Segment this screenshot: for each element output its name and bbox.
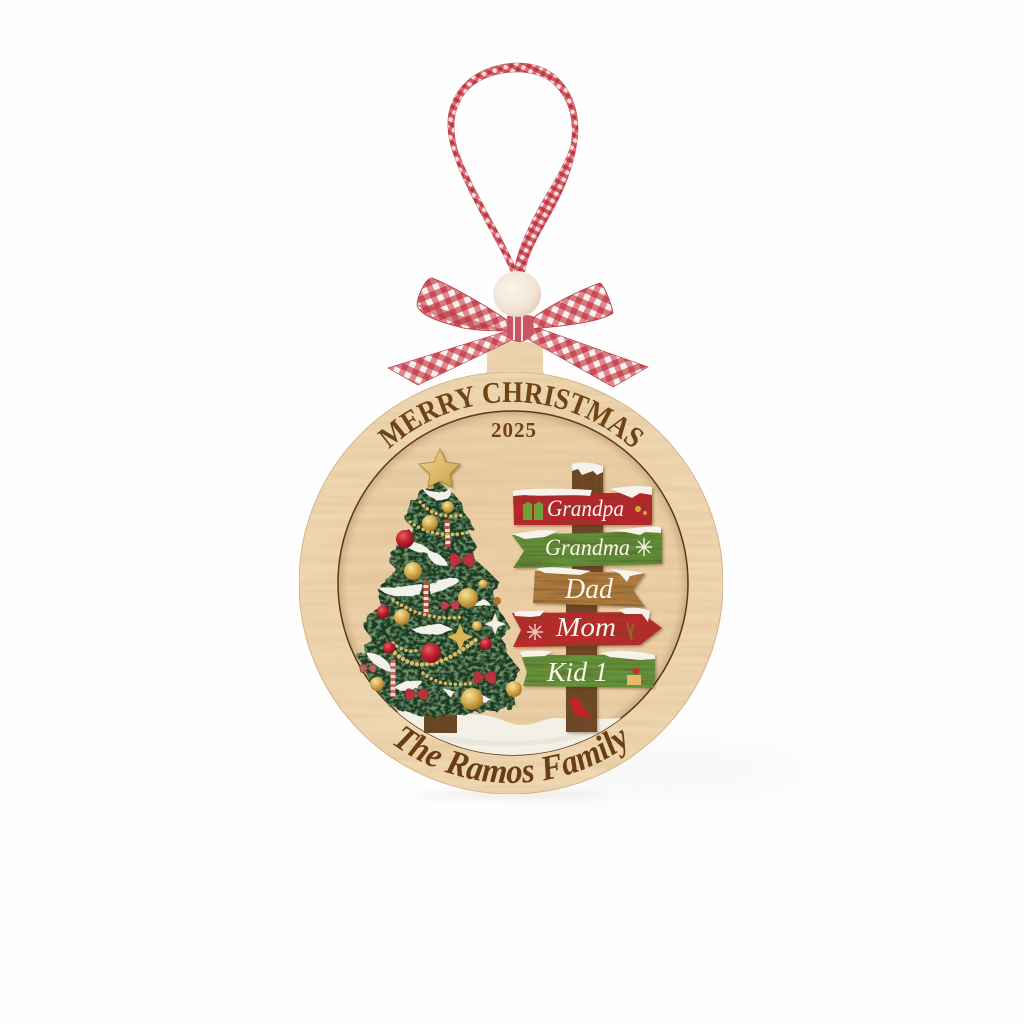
- sign: Kid 1: [520, 650, 655, 688]
- label: Grandpa: [547, 496, 624, 521]
- gold star ornament: [447, 624, 473, 650]
- wooden bead: [493, 271, 541, 317]
- icon: snowflake: [636, 538, 652, 556]
- recessed inner panel: [338, 411, 688, 755]
- sign: Mom: [512, 608, 662, 647]
- hanging tab: [484, 342, 546, 378]
- bow and bead: [388, 271, 648, 387]
- snow on branches: [366, 487, 492, 703]
- panel inner shadow: [338, 412, 688, 718]
- family name: The Ramos Family: [392, 726, 626, 784]
- panel cut line: [338, 411, 688, 755]
- gold baubles: [370, 501, 522, 710]
- candy canes: [393, 520, 448, 697]
- icon: snowflake: [527, 624, 543, 640]
- sign: Grandma: [512, 526, 662, 568]
- sign: Dad: [533, 567, 645, 607]
- icon: holly: [627, 622, 633, 640]
- tree trunk: [424, 706, 457, 733]
- post: [566, 462, 603, 732]
- year: 2025: [491, 418, 537, 442]
- icon: gift: [627, 668, 641, 685]
- gold garlands: [393, 502, 478, 684]
- hanging ribbon loop: [448, 63, 578, 272]
- ornament body: [299, 342, 723, 794]
- bow left loop fold: [417, 305, 505, 330]
- white star ornament: [484, 613, 506, 635]
- cast shadow: [415, 756, 820, 797]
- label: Grandma: [545, 535, 630, 560]
- foliage: [357, 483, 520, 717]
- tree-top star: [419, 449, 460, 487]
- label: Kid 1: [546, 657, 608, 687]
- bow right loop: [530, 283, 613, 329]
- icon: bells: [635, 506, 647, 515]
- red baubles: [376, 530, 492, 663]
- title: Merry Christmas: MERRY CHRISTMAS: [376, 382, 644, 449]
- icon: cardinal: [568, 697, 592, 717]
- signpost: [512, 462, 662, 732]
- bow left loop: [417, 278, 510, 331]
- bow knot: [507, 314, 534, 342]
- label: Dad: [564, 574, 614, 605]
- snow ground: [398, 709, 622, 755]
- outer wooden ring: [299, 372, 723, 794]
- sign: Grandpa: [513, 486, 652, 525]
- bow tails: [388, 331, 512, 385]
- ribbon bows on tree: [360, 553, 496, 700]
- label: Mom: [555, 612, 616, 642]
- christmas tree: [357, 449, 522, 733]
- icon: gift: [523, 502, 543, 520]
